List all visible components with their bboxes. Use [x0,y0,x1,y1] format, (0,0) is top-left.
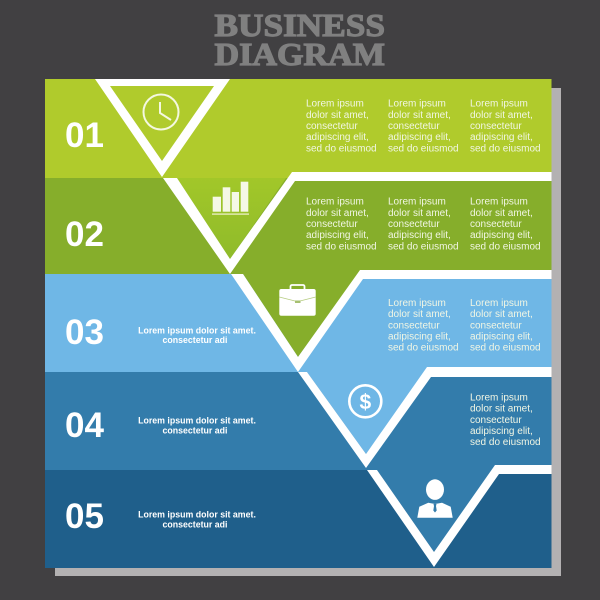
text block: row 2 column 2: dolor sit amet, [388,208,451,219]
text block: row 3 column 3: adipiscing elit, [470,331,533,342]
caption: row 5: Lorem ipsum dolor sit amet. [138,510,256,520]
text block: row 3 column 3: Lorem ipsum [470,298,528,309]
text block: row 3 column 3: dolor sit amet, [470,309,533,320]
text block: row 2 column 2: sed do eiusmod [388,241,459,252]
title: DIAGRAM [214,36,385,72]
caption: row 3: consectetur adi [162,335,228,345]
text block: row 2 column 2: Lorem ipsum [388,197,446,208]
icon: businessman [417,479,453,518]
number 04: 04 [65,406,104,445]
icon: dollar coin [349,385,381,417]
text block: row 1 column 3: consectetur [470,121,522,132]
panel: step 02 band [45,172,552,274]
text block: row 3 column 2: adipiscing elit, [388,331,451,342]
number 01: 01 [65,116,104,155]
number 05: 05 [65,497,104,536]
caption: row 3: Lorem ipsum dolor sit amet. [138,325,256,335]
step 05 chevron outline [367,465,552,567]
text block: row 1 column 3: adipiscing elit, [470,132,533,143]
step 05 triangle interior [377,470,496,552]
text block: row 2 column 1: sed do eiusmod [306,241,377,252]
text block: row 1 column 1: Lorem ipsum [306,99,364,110]
step 02 triangle interior [177,178,286,259]
text block: row 3 column 2: consectetur [388,320,440,331]
step 03 chevron outline [231,270,552,372]
step 04 chevron outline [298,367,552,468]
text block: row 2 column 3: dolor sit amet, [470,208,533,219]
text block: row 4 column 3: sed do eiusmod [470,437,541,448]
text block: row 2 column 3: consectetur [470,219,522,230]
step 03 triangle interior [243,274,358,357]
text block: row 1 column 1: adipiscing elit, [306,132,369,143]
caption: row 4: Lorem ipsum dolor sit amet. [138,416,256,426]
text block: row 3 column 3: consectetur [470,320,522,331]
icon: dollar coin: $ [359,391,371,414]
text block: row 1 column 3: dolor sit amet, [470,110,533,121]
caption: row 5: consectetur adi [162,519,228,529]
text block: row 1 column 2: sed do eiusmod [388,143,459,154]
text block: row 3 column 2: Lorem ipsum [388,298,446,309]
caption: row 4: consectetur adi [162,425,228,435]
text block: row 1 column 1: dolor sit amet, [306,110,369,121]
panel: step 03 band [45,270,552,372]
text block: row 2 column 1: Lorem ipsum [306,197,364,208]
step 04 triangle interior [307,372,425,454]
text block: row 1 column 2: consectetur [388,121,440,132]
title: BUSINESS [214,7,385,43]
icon: briefcase [279,285,316,316]
text block: row 1 column 2: dolor sit amet, [388,110,451,121]
text block: row 2 column 1: dolor sit amet, [306,208,369,219]
text block: row 4 column 3: dolor sit amet, [470,404,533,415]
icon: bar chart [212,182,249,215]
number 03: 03 [65,313,104,352]
text block: row 4 column 3: adipiscing elit, [470,426,533,437]
text block: row 4 column 3: consectetur [470,415,522,426]
text block: row 1 column 3: Lorem ipsum [470,99,528,110]
text block: row 1 column 2: adipiscing elit, [388,132,451,143]
text block: row 2 column 3: Lorem ipsum [470,197,528,208]
text block: row 1 column 2: Lorem ipsum [388,99,446,110]
text block: row 1 column 1: consectetur [306,121,358,132]
text block: row 3 column 2: dolor sit amet, [388,309,451,320]
icon: clock [144,94,178,130]
panel: step 01 band [45,79,552,178]
panel: step 05 band [45,465,552,568]
number 02: 02 [65,215,104,254]
text block: row 4 column 3: Lorem ipsum [470,392,528,404]
text block: row 2 column 1: adipiscing elit, [306,230,369,241]
drop shadow panel [55,88,561,576]
text block: row 3 column 2: sed do eiusmod [388,343,459,354]
title [214,7,385,72]
panel: step 04 band [45,367,552,470]
text block: row 2 column 3: adipiscing elit, [470,230,533,241]
text block: row 1 column 3: sed do eiusmod [470,143,541,154]
step 01 triangle outline [95,79,230,177]
text block: row 2 column 1: consectetur [306,219,358,230]
text block: row 2 column 3: sed do eiusmod [470,241,541,252]
text block: row 2 column 2: consectetur [388,219,440,230]
text block: row 2 column 2: adipiscing elit, [388,230,451,241]
text block: row 1 column 1: sed do eiusmod [306,143,377,154]
step 02 chevron outline [163,172,552,274]
text block: row 3 column 3: sed do eiusmod [470,343,541,354]
